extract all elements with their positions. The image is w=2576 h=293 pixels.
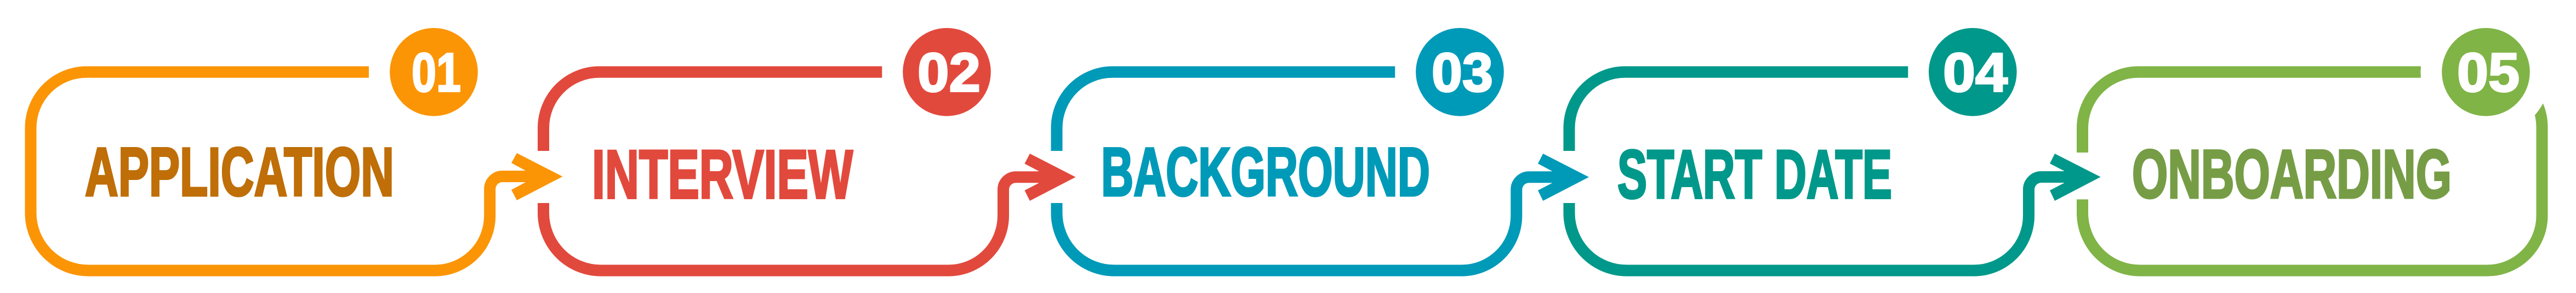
badge: 05: 05 bbox=[2457, 42, 2520, 103]
badge: 01: 01 bbox=[412, 42, 461, 103]
badge: 01 bbox=[390, 28, 478, 116]
arrow: step 2 to step 3 bbox=[1024, 154, 1075, 201]
frame: step 1 outline with connector bbox=[31, 72, 529, 271]
badge: 03: 03 bbox=[1432, 42, 1493, 103]
badge: 04: 04 bbox=[1943, 42, 2008, 103]
panel: step 1 application bbox=[31, 28, 562, 271]
frame: step 3 outline with connector bbox=[1057, 72, 1555, 271]
heading: background: BACKGROUND bbox=[1101, 134, 1430, 211]
badge: 02: 02 bbox=[917, 42, 981, 103]
panel: step 2 interview bbox=[544, 28, 1075, 271]
frame: step 2 outline with connector bbox=[544, 72, 1042, 271]
panel: step 4 start date bbox=[1569, 28, 2101, 271]
badge: 02 bbox=[903, 28, 991, 116]
arrow: step 3 to step 4 bbox=[1538, 154, 1589, 201]
badge: 04 bbox=[1929, 28, 2017, 116]
arrow: step 4 to step 5 bbox=[2050, 154, 2101, 201]
frame: step 4 outline with connector bbox=[1569, 72, 2067, 271]
panel: step 3 background bbox=[1057, 28, 1589, 271]
badge: 05 bbox=[2420, 7, 2551, 137]
panel: step 5 onboarding bbox=[2083, 7, 2551, 271]
arrow: step 1 to step 2 bbox=[511, 153, 562, 200]
frame: step 5 outline bbox=[2083, 72, 2542, 271]
heading: start date: START DATE bbox=[1617, 137, 1892, 213]
badge: 03 bbox=[1416, 28, 1504, 116]
heading: interview: INTERVIEW bbox=[592, 137, 853, 213]
heading: application: APPLICATION bbox=[85, 134, 394, 211]
